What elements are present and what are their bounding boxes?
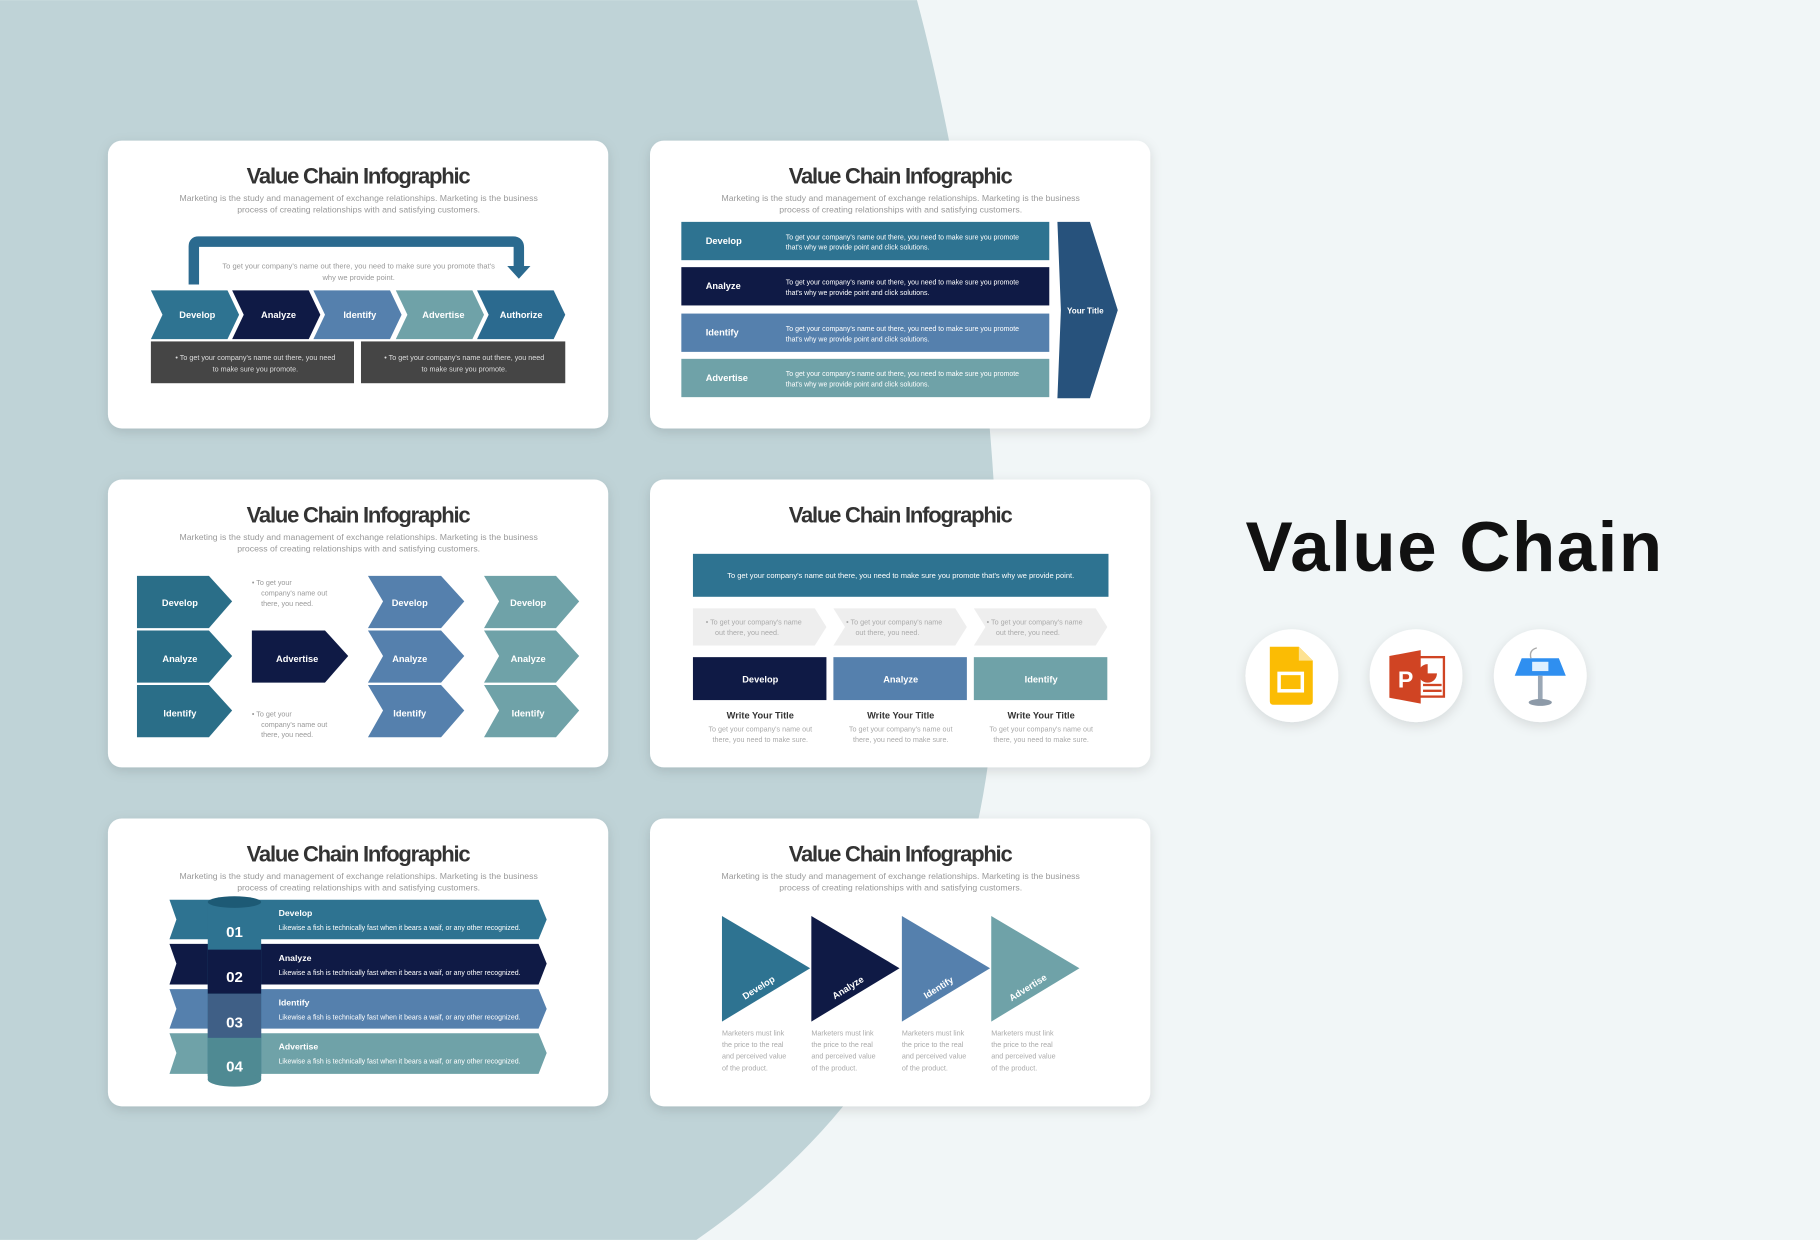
dark boxes (151, 341, 565, 383)
card 3: chevron columns: Develop (392, 598, 428, 608)
loop arrow (194, 242, 530, 285)
card 2: rows with big chevron (650, 141, 1150, 428)
card 4: banner and boxes: there, you need to make sure. (993, 735, 1089, 744)
card 2: rows with big chevron: process of creating relationships with and satisfying customers. (779, 205, 1022, 215)
card 6: triangles: the price to the real (811, 1040, 873, 1049)
card 3: chevron columns: Marketing is the study and management of exchange relationships. Marketing is the business (179, 532, 538, 542)
rows (681, 222, 1049, 397)
card 6: triangles: Identify (922, 974, 956, 1001)
big chevron: Your Title (1067, 307, 1104, 316)
card 3: chevron columns: Develop (162, 598, 198, 608)
dark boxes: • To get your company's name out there, you need (175, 353, 335, 362)
card 5: numbered ribbons: process of creating relationships with and satisfying customers. (237, 882, 480, 892)
cylinder (208, 896, 261, 1087)
title: Value Chain Infographic (247, 164, 471, 189)
rows: To get your company's name out there, you need to make sure you promote (786, 234, 1019, 241)
dark boxes: • To get your company's name out there, you need (384, 353, 544, 362)
main heading: Value Chain (1245, 508, 1662, 587)
card 6: triangles: of the product. (902, 1063, 948, 1072)
card 6: triangles: Marketers must link (722, 1029, 785, 1038)
rows: To get your company's name out there, you need to make sure you promote (786, 280, 1019, 287)
card 3: chevron columns: there, you need. (261, 599, 313, 608)
card 3: chevron columns: there, you need. (261, 730, 313, 739)
card 4: banner and boxes: Develop (742, 675, 779, 685)
card 6: triangles (650, 818, 1150, 1106)
card 2: rows with big chevron: Value Chain Infographic (789, 164, 1013, 189)
icon: google slides (1245, 629, 1338, 722)
chevrons: Authorize (500, 310, 543, 320)
card 5: numbered ribbons (108, 818, 608, 1106)
loop arrow: why we provide point. (321, 273, 395, 282)
card 5: numbered ribbons: Likewise a fish is technically fast when it bears a waif, or any other recognized. (279, 925, 521, 932)
card 6: triangles: Marketing is the study and management of exchange relationships. Marketing is the business (722, 871, 1081, 881)
card 6: triangles: Value Chain Infographic (789, 841, 1013, 866)
card 4: banner and boxes: Value Chain Infographic (789, 502, 1013, 527)
card 6: triangles: of the product. (811, 1063, 857, 1072)
chevrons: Analyze (261, 310, 296, 320)
card 6: triangles: Marketers must link (902, 1029, 965, 1038)
card 3: chevron columns: Advertise (276, 654, 318, 664)
rows: Identify (706, 328, 740, 338)
card 3: chevron columns: Identify (512, 708, 545, 718)
card 4: banner and boxes (650, 480, 1150, 767)
rows: Develop (706, 236, 742, 246)
card 5: numbered ribbons: Value Chain Infographic (247, 841, 471, 866)
card 4: banner and boxes: • To get your company's name (706, 618, 802, 627)
card 4: banner and boxes: To get your company's name out there, you need to make sure you promote that's why we provide point. (727, 571, 1074, 580)
icon: powerpoint (1370, 629, 1462, 722)
card 4: banner and boxes: To get your company's name out (849, 724, 953, 733)
card 4: banner and boxes: out there, you need. (996, 628, 1060, 637)
card 6: triangles: and perceived value (722, 1052, 786, 1061)
card 3: chevron columns (108, 480, 608, 767)
card 6: triangles: Develop (741, 974, 777, 1002)
rows: that's why we provide point and click solutions. (786, 290, 929, 297)
card 4: banner and boxes: Analyze (883, 675, 918, 685)
card 4: banner and boxes: there, you need to make sure. (713, 735, 808, 744)
chevrons: Develop (179, 310, 216, 320)
card 5: numbered ribbons: Likewise a fish is technically fast when it bears a waif, or any other recognized. (279, 1058, 521, 1065)
cylinder: 04 (226, 1059, 243, 1076)
card 3: chevron columns: Identify (393, 708, 427, 718)
card 6: triangles: and perceived value (991, 1052, 1056, 1061)
cylinder: 03 (226, 1014, 243, 1031)
chevrons: Advertise (422, 310, 465, 320)
card 3: chevron columns: Analyze (392, 654, 427, 664)
card 6: triangles: the price to the real (991, 1040, 1053, 1049)
rows: Advertise (706, 373, 748, 383)
card 3: chevron columns: process of creating relationships with and satisfying customers. (237, 544, 480, 554)
card 3: chevron columns: Identify (163, 708, 197, 718)
card 5: numbered ribbons: Likewise a fish is technically fast when it bears a waif, or any other recognized. (279, 970, 521, 977)
card 4: banner and boxes: • To get your company's name (987, 618, 1083, 627)
card 3: chevron columns: • To get your (252, 709, 292, 718)
rows: To get your company's name out there, you need to make sure you promote (786, 326, 1019, 333)
card 6: triangles: Analyze (831, 974, 866, 1001)
loop arrow: To get your company's name out there, you need to make sure you promote that's (222, 261, 495, 270)
card 6: triangles: Marketers must link (991, 1029, 1054, 1038)
subtitle (179, 193, 538, 215)
cylinder: 01 (226, 924, 243, 941)
card 6: triangles: of the product. (991, 1063, 1037, 1072)
subtitle: process of creating relationships with and satisfying customers. (237, 205, 480, 215)
card 1: arrow process (108, 141, 608, 428)
card 6: triangles: and perceived value (902, 1052, 966, 1061)
card 4: banner and boxes: there, you need to make sure. (853, 735, 948, 744)
rows: that's why we provide point and click solutions. (786, 336, 929, 343)
rows: that's why we provide point and click solutions. (786, 245, 929, 252)
card 3: chevron columns: company's name out (261, 720, 327, 729)
card 5: numbered ribbons: Advertise (279, 1041, 318, 1051)
card 3: chevron columns: company's name out (261, 589, 327, 598)
card 3: chevron columns: • To get your (252, 578, 292, 587)
card 4: banner and boxes: To get your company's name out (708, 724, 812, 733)
card 3: chevron columns: Value Chain Infographic (247, 502, 471, 527)
subtitle: Marketing is the study and management of exchange relationships. Marketing is the business (179, 193, 538, 203)
card 4: banner and boxes: To get your company's name out (989, 724, 1093, 733)
card 4: banner and boxes: Write Your Title (727, 711, 794, 721)
card 6: triangles: the price to the real (722, 1040, 784, 1049)
card 6: triangles: the price to the real (902, 1040, 964, 1049)
cylinder: 02 (226, 969, 243, 986)
card 4: banner and boxes: Identify (1025, 675, 1058, 685)
card 6: triangles: and perceived value (811, 1052, 876, 1061)
card 5: numbered ribbons: Marketing is the study and management of exchange relationships. Marketing is the business (179, 871, 538, 881)
card 6: triangles: process of creating relationships with and satisfying customers. (779, 882, 1022, 892)
card 4: banner and boxes: Write Your Title (1008, 711, 1075, 721)
card 4: banner and boxes: out there, you need. (855, 628, 919, 637)
card 6: triangles: of the product. (722, 1063, 768, 1072)
card 4: banner and boxes: • To get your company's name (846, 618, 942, 627)
card 5: numbered ribbons: Likewise a fish is technically fast when it bears a waif, or any other recognized. (279, 1014, 521, 1021)
rows: To get your company's name out there, you need to make sure you promote (786, 371, 1019, 378)
card 4: banner and boxes: Write Your Title (867, 711, 934, 721)
card 2: rows with big chevron: Marketing is the study and management of exchange relationships. Marketing is the business (722, 193, 1081, 203)
card 4: banner and boxes: out there, you need. (715, 628, 779, 637)
chevrons (151, 290, 565, 339)
dark boxes: to make sure you promote. (213, 365, 298, 374)
card 5: numbered ribbons: Analyze (279, 953, 312, 963)
dark boxes: to make sure you promote. (422, 365, 507, 374)
icon: keynote (1494, 629, 1587, 722)
card 5: numbered ribbons: Identify (279, 997, 310, 1007)
rows: Analyze (706, 281, 741, 291)
card 5: numbered ribbons: Develop (279, 908, 312, 918)
big chevron (1057, 222, 1118, 398)
card 3: chevron columns: Develop (510, 598, 546, 608)
chevrons: Identify (343, 310, 377, 320)
card 3: chevron columns: Analyze (511, 654, 546, 664)
icon: powerpoint: P (1398, 666, 1413, 692)
card 6: triangles: Advertise (1007, 972, 1049, 1003)
card 3: chevron columns: Analyze (162, 654, 197, 664)
card 6: triangles: Marketers must link (811, 1029, 874, 1038)
rows: that's why we provide point and click solutions. (786, 382, 929, 389)
